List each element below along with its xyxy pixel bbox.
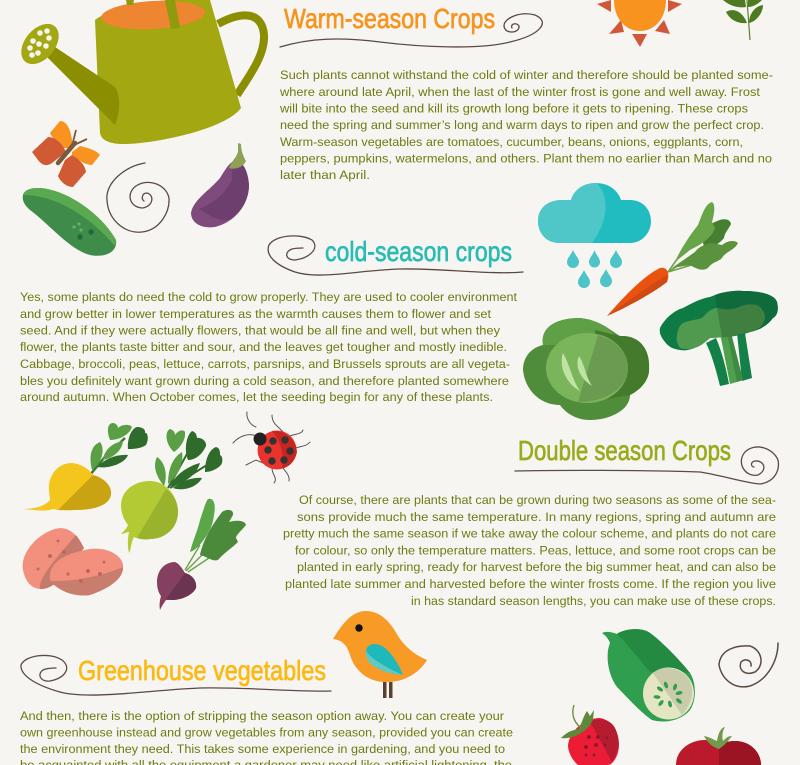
icon: spiral doodle 2 [719,643,778,687]
text block: greenhouse vegetables: And then, there is the option of stripping the season option away. You can create your [20,709,504,723]
icon: tomato [676,727,761,765]
heading: cold-season crops [268,236,523,275]
heading: greenhouse vegetables: Greenhouse vegetables [78,655,326,686]
text block: double season crops: planted late summer and harvested before the winter frosts come. If the region you live [285,577,776,591]
text block: cold-season crops: Cabbage, broccoli, peas, lettuce, carrots, parsnips, and Brussels sprouts are all vegeta- [20,357,510,371]
icon: cut cucumber [602,629,695,722]
text block: double season crops: in has standard season lengths, you can make use of these crops. [411,594,776,608]
text block: warm-season crops [279,68,773,182]
icon: rain cloud [538,183,651,288]
heading: warm-season crops [280,3,542,47]
icon: strawberry [561,705,619,765]
icon: bird [333,611,427,698]
text block: cold-season crops: around autumn. When October comes, let the seeding begin for any of these plants. [20,390,493,404]
text block: greenhouse vegetables [20,709,513,765]
icon: cucumber [23,188,116,256]
heading: double season crops [515,435,778,484]
heading: warm-season crops: Warm-season Crops [284,3,495,34]
icon: eggplant [191,143,249,227]
text block: double season crops [283,493,776,608]
icon: broccoli [660,291,778,386]
icon: spiral doodle [107,163,169,232]
text block: warm-season crops: where around late April, when the last of the winter frost is gone and well away. Frost [279,85,761,99]
text block: greenhouse vegetables: the environment they need. This takes some experience in gardening, and you need to [20,742,505,756]
text block: cold-season crops: and grow better in lower temperatures as the warmth causes them to flower and set [20,307,492,321]
text block: cold-season crops: Yes, some plants do need the cold to grow properly. They are used to cooler environment [20,290,518,304]
text block: cold-season crops [20,290,518,404]
icon: sun [597,0,682,47]
icon: yellow turnip [23,423,148,511]
text block: cold-season crops: bles you definitely want grown during a cold season, and therefore planted somewhere [20,374,509,388]
text block: cold-season crops: seed. And if they were actually flowers, that would be all fine and well, but when they [20,324,501,338]
text block: double season crops: sons provide much the same temperature. In many regions, spring and autumn are [297,510,776,524]
text block: warm-season crops: will bite into the seed and kill its growth long before it gets to ripening. These crops [279,102,748,116]
text block: warm-season crops: later than April. [280,168,370,182]
heading: double season crops: Double season Crops [518,435,731,466]
heading: greenhouse vegetables [21,655,331,695]
text block: warm-season crops: Warm-season vegetables are tomatoes, cucumber, beans, onions, eggplants, corn, [280,135,743,149]
text block: warm-season crops: Such plants cannot withstand the cold of winter and therefore should be planted some- [280,68,773,82]
icon: potatoes [23,528,123,595]
text block: double season crops: planted in early spring, ready for harvest before the big summer heat, and can also be [297,560,776,574]
icon: carrot [607,202,738,316]
text block: warm-season crops: need the spring and summer’s long and warm days to ripen and grow the perfect crop. [280,118,764,132]
text block: cold-season crops: flower, the plants taste bitter and sour, and the leaves get tougher and mostly inedible. [20,340,507,354]
text block: warm-season crops: peppers, pumpkins, watermelons, and others. Plant them no earlier than March and no [280,152,772,166]
text block: double season crops: Of course, there are plants that can be grown during two seasons as some of the sea- [299,493,776,507]
icon: green turnip [121,429,222,553]
icon: leaf sprig [723,0,763,40]
text block: greenhouse vegetables: own greenhouse instead and grow vegetables from any season, provided you can create [20,726,513,740]
icon: watering can [14,0,264,144]
icon: cabbage [523,318,649,420]
text block: double season crops: pretty much the same season if we take away the colour scheme, and plants do not care [283,526,776,540]
icon: ladybug [233,412,310,483]
icon: beet [157,499,246,610]
heading: cold-season crops: cold-season crops [325,236,512,267]
text block: double season crops: for colour, so only the temperature matters. Peas, lettuce, and some root crops can be [295,544,776,558]
icon: butterfly [32,121,100,187]
